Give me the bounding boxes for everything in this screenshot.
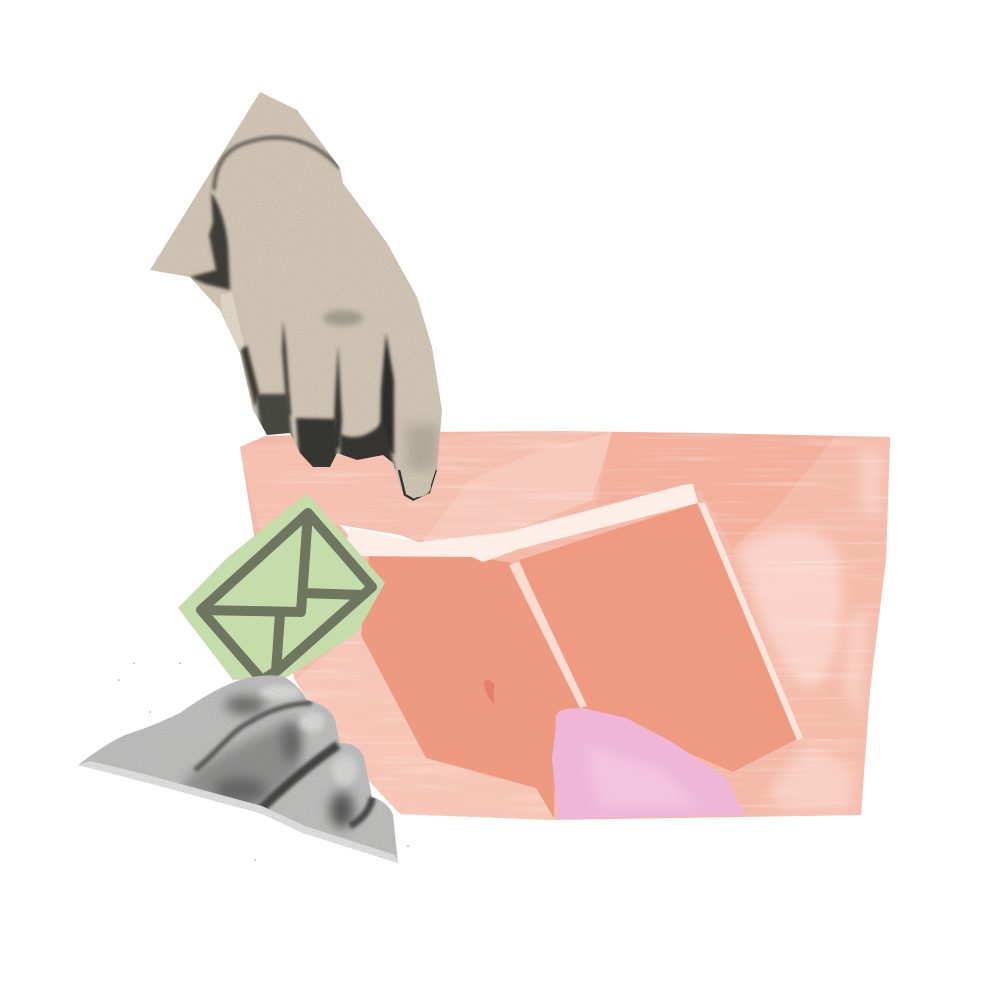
dark shading blobs <box>225 696 265 714</box>
book spine <box>509 562 587 708</box>
lower-left floral area <box>295 625 556 820</box>
panel: pink painted background <box>230 425 900 825</box>
paper specks <box>118 662 409 861</box>
thumb: pink <box>552 708 745 819</box>
fingertip outline <box>399 470 437 500</box>
outer finger shadow <box>241 345 259 408</box>
index fingertip speckle <box>405 425 440 472</box>
paint streak texture <box>230 425 900 825</box>
book: open orange book <box>345 484 803 818</box>
crease shadows <box>195 703 312 770</box>
flower patches <box>740 529 842 690</box>
book left page <box>361 556 583 818</box>
paper grain <box>145 85 445 505</box>
upper-left painted area <box>240 431 590 462</box>
book right edge <box>698 503 803 740</box>
hand: beige pointing hand <box>145 85 445 505</box>
thumb highlight <box>585 745 700 806</box>
highlights <box>260 685 300 699</box>
book right page <box>519 503 799 772</box>
book top edge <box>345 484 698 562</box>
fingernail <box>417 485 431 497</box>
cuff line <box>214 138 340 190</box>
torn paper edge <box>78 761 400 866</box>
ink spot <box>484 680 495 704</box>
collage illustration <box>78 92 890 863</box>
pale wrist patch <box>220 292 244 353</box>
finger gaps <box>282 320 291 415</box>
knuckle shading <box>323 310 363 326</box>
sleeve shadow <box>190 192 230 290</box>
broad shaded underside <box>180 720 300 812</box>
dark fingertips <box>256 394 292 440</box>
hand: grey lower hand <box>78 675 398 863</box>
icon: green envelope on diamond <box>178 493 385 680</box>
darker drape behind book <box>596 432 836 548</box>
floral sleeve on the right <box>733 436 892 816</box>
central drape <box>420 432 612 545</box>
white brush stroke near envelope <box>340 525 416 542</box>
paper grain <box>78 676 398 862</box>
